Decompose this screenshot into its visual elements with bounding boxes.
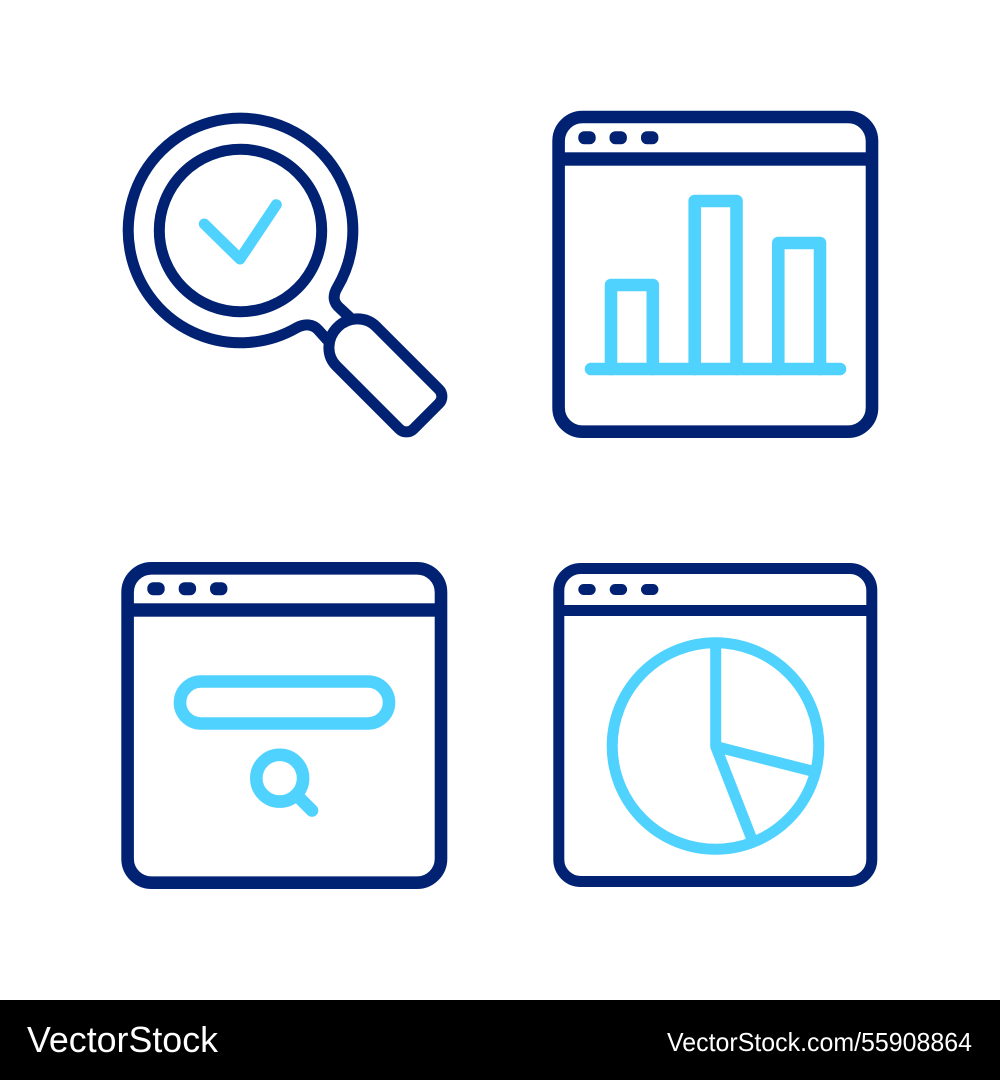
magnifier handle bbox=[318, 308, 446, 436]
window frame bbox=[559, 117, 872, 432]
window frame bbox=[559, 568, 872, 882]
magnifier outer lens and neck bbox=[128, 118, 353, 343]
icon: browser window with search bar bbox=[122, 568, 447, 883]
window dots bbox=[147, 582, 227, 595]
magnifier inner lens bbox=[159, 149, 322, 312]
window header line bbox=[554, 605, 877, 616]
footer brand: VectorStock bbox=[27, 1019, 219, 1060]
footer bar bbox=[0, 1000, 1000, 1080]
pie chart bbox=[612, 643, 819, 849]
window dots bbox=[578, 584, 658, 595]
search bar bbox=[180, 682, 389, 724]
footer image id: VectorStock.com/55908864 bbox=[667, 1027, 972, 1057]
window dots bbox=[578, 131, 658, 144]
icon: magnifying glass with checkmark bbox=[128, 118, 446, 436]
bar chart bbox=[591, 201, 840, 369]
window frame bbox=[128, 568, 441, 883]
icon: browser window with bar chart bbox=[553, 117, 878, 432]
checkmark bbox=[204, 205, 276, 259]
small magnifier bbox=[256, 755, 312, 810]
window header line bbox=[553, 152, 878, 166]
icon: browser window with pie chart bbox=[554, 568, 877, 882]
window header line bbox=[122, 603, 447, 617]
